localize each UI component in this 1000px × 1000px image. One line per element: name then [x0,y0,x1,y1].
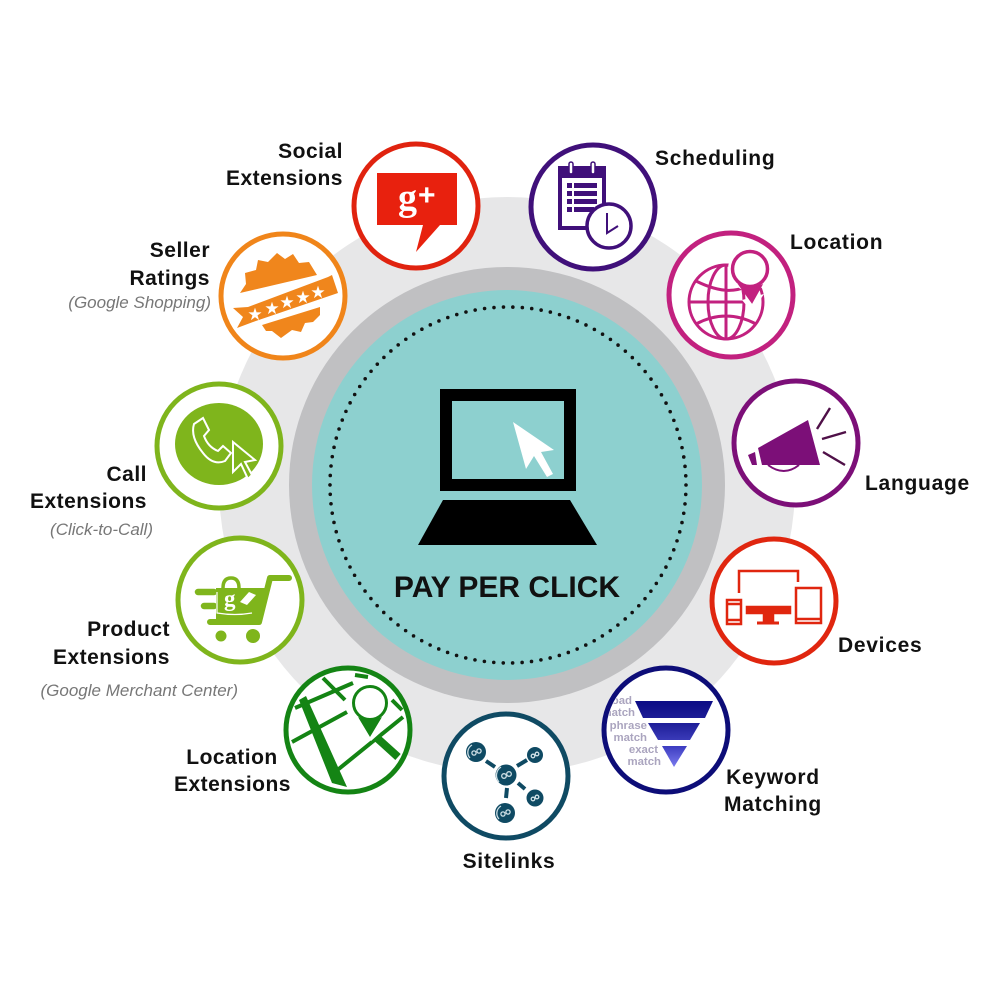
panel: product extensions [41,538,302,700]
panel: call extensions [30,384,281,539]
label: extensions: Extensions [174,773,291,796]
icon: match funnel [609,696,713,767]
panel: location extensions [174,668,410,796]
panel: seller ratings [68,234,345,358]
icon: match funnel: match [601,707,635,719]
icon: laptop with cursor [418,395,597,545]
label: seller ratings: Seller [150,239,210,262]
icon: globe and pin [689,247,772,339]
icon: match funnel: broad [600,695,632,707]
label: call extensions: Call [106,463,147,486]
note: google shopping: (Google Shopping) [68,293,211,312]
label: scheduling: Scheduling [655,147,775,170]
title: PAY PER CLICK [394,571,620,604]
icon: star rating badge: ★ [279,293,295,313]
icon: star rating badge: ★ [264,299,280,319]
panel: scheduling [531,145,775,269]
gray ring [289,267,725,703]
icon: calendar and clock [558,162,631,248]
panel: sitelinks [444,714,568,873]
label: social extensions: Extensions [226,167,343,190]
icon: shopping cart: g [224,586,236,611]
icon: star rating badge: ★ [310,283,326,303]
icon: shopping cart [198,578,289,643]
label: devices: Devices [838,634,922,657]
label: language: Language [865,472,970,495]
panel: social extensions [226,140,478,268]
label: location: Location [186,746,278,769]
icon: g+ speech bubble: g [398,177,417,219]
icon: megaphone [748,408,846,471]
label: keyword matching: Keyword [726,766,820,789]
panel: keyword matching [600,668,822,816]
icon: match funnel: phrase [610,720,647,732]
icon: star rating badge: ★ [295,288,311,308]
panel: location [669,231,883,357]
background disc [219,197,795,773]
label: call extensions: Extensions [30,490,147,513]
panel: language [734,381,970,505]
note: google merchant center: (Google Merchant Center) [41,681,238,700]
central teal disc [312,290,702,680]
icon: street map and pin [292,675,403,787]
label: keyword matching: Matching [724,793,822,816]
label: sitelinks: Sitelinks [463,850,555,873]
icon: g+ speech bubble [377,173,457,252]
label: product extensions: Product [87,618,170,641]
icon: link network [466,742,544,823]
icon: monitor, phone and tablet [727,571,821,624]
icon: star rating badge: ★ [247,305,263,325]
icon: g+ speech bubble: + [418,179,436,212]
dotted circle [330,307,686,663]
label: seller ratings: Ratings [129,267,210,290]
icon: phone and cursor [175,403,263,485]
label: product extensions: Extensions [53,646,170,669]
icon: match funnel: match [613,732,647,744]
icon: match funnel: match [627,756,661,768]
label: location: Location [790,231,883,254]
panel: devices [712,539,922,663]
icon: star rating badge [233,253,338,338]
icon: match funnel: exact [629,744,658,756]
label: social extensions: Social [278,140,343,163]
note: click-to-call: (Click-to-Call) [50,520,153,539]
